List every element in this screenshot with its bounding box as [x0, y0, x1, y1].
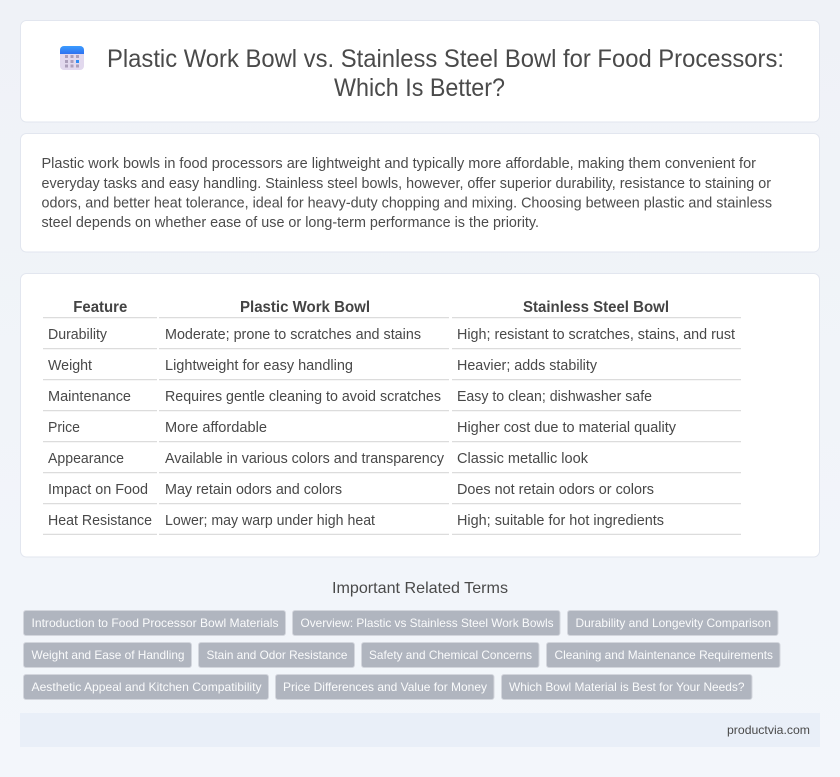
tag: Introduction to Food Processor Bowl Materials — [32, 616, 278, 630]
tag — [568, 610, 778, 636]
footer source text: productvia.com — [727, 723, 810, 737]
panel: summary — [20, 134, 820, 252]
row: durability — [48, 327, 735, 343]
row: appearance: Appearance — [48, 451, 124, 467]
row: durability: High; resistant to scratches, stains, and rust — [457, 327, 735, 343]
row: maintenance: Requires gentle cleaning to avoid scratches — [165, 389, 441, 405]
tag — [502, 674, 752, 700]
row: durability: Durability — [48, 327, 108, 343]
tag — [362, 642, 539, 668]
row: weight: Weight — [48, 358, 92, 374]
row: heat resistance — [48, 513, 664, 529]
row: impact on food: Impact on Food — [48, 482, 148, 498]
header panel — [20, 20, 820, 122]
tag: Which Bowl Material is Best for Your Needs? — [509, 680, 745, 694]
tag: Safety and Chemical Concerns — [369, 648, 532, 662]
tag: Stain and Odor Resistance — [206, 648, 348, 662]
title — [107, 45, 784, 102]
tag — [198, 642, 354, 668]
row: weight: Heavier; adds stability — [457, 358, 598, 374]
icon: calendar — [60, 46, 84, 70]
table header row: Feature — [73, 299, 128, 316]
tag: Price Differences and Value for Money — [283, 680, 487, 694]
row: weight: Lightweight for easy handling — [165, 358, 353, 374]
row: impact on food: Does not retain odors or colors — [457, 482, 654, 498]
row: price — [48, 420, 677, 436]
tag — [276, 674, 494, 700]
heading: related terms: Important Related Terms — [332, 580, 508, 597]
tag — [24, 610, 286, 636]
row: heat resistance: Heat Resistance — [48, 513, 152, 529]
tag: Aesthetic Appeal and Kitchen Compatibility — [32, 680, 262, 694]
row: appearance: Available in various colors and transparency — [165, 451, 445, 467]
tag: Weight and Ease of Handling — [32, 648, 184, 662]
row: price: More affordable — [165, 420, 267, 436]
summary text: steel depends on whether ease of use or long-term performance is the priority. — [42, 215, 539, 231]
table header row: Plastic Work Bowl — [240, 299, 370, 316]
tag: Durability and Longevity Comparison — [576, 616, 771, 630]
summary text — [42, 156, 772, 231]
row: impact on food: May retain odors and colors — [165, 482, 342, 498]
row: maintenance — [48, 389, 652, 405]
summary text: odors, and better heat tolerance, ideal for heavy-duty chopping and mixing. Choosing between plastic and stainless — [42, 196, 772, 212]
row: impact on food — [48, 482, 654, 498]
row: appearance — [48, 451, 589, 467]
table header row: Stainless Steel Bowl — [523, 299, 669, 316]
table rules — [43, 318, 741, 534]
tag — [24, 674, 268, 700]
title: Which Is Better? — [334, 74, 505, 102]
summary text: everyday tasks and easy handling. Stainless steel bowls, however, offer superior durability, resistance to staining or — [42, 176, 771, 192]
row: maintenance: Easy to clean; dishwasher safe — [457, 389, 652, 405]
tag — [546, 642, 780, 668]
row: appearance: Classic metallic look — [457, 451, 589, 467]
tag — [24, 642, 192, 668]
tag: Cleaning and Maintenance Requirements — [554, 648, 773, 662]
row: heat resistance: High; suitable for hot ingredients — [457, 513, 664, 529]
row: weight — [48, 358, 598, 374]
title: Plastic Work Bowl vs. Stainless Steel Bowl for Food Processors: — [107, 45, 784, 73]
row: price: Price — [48, 420, 80, 436]
related term tags — [24, 610, 780, 700]
footer — [20, 713, 820, 747]
tag — [292, 610, 560, 636]
table header row — [73, 299, 669, 316]
summary text: Plastic work bowls in food processors are lightweight and typically more affordable, making them convenient for — [42, 156, 756, 172]
row: heat resistance: Lower; may warp under high heat — [165, 513, 375, 529]
row: durability: Moderate; prone to scratches and stains — [165, 327, 421, 343]
panel: comparison table — [20, 274, 820, 557]
row: price: Higher cost due to material quality — [457, 420, 677, 436]
tag: Overview: Plastic vs Stainless Steel Work Bowls — [300, 616, 554, 630]
row: maintenance: Maintenance — [48, 389, 131, 405]
